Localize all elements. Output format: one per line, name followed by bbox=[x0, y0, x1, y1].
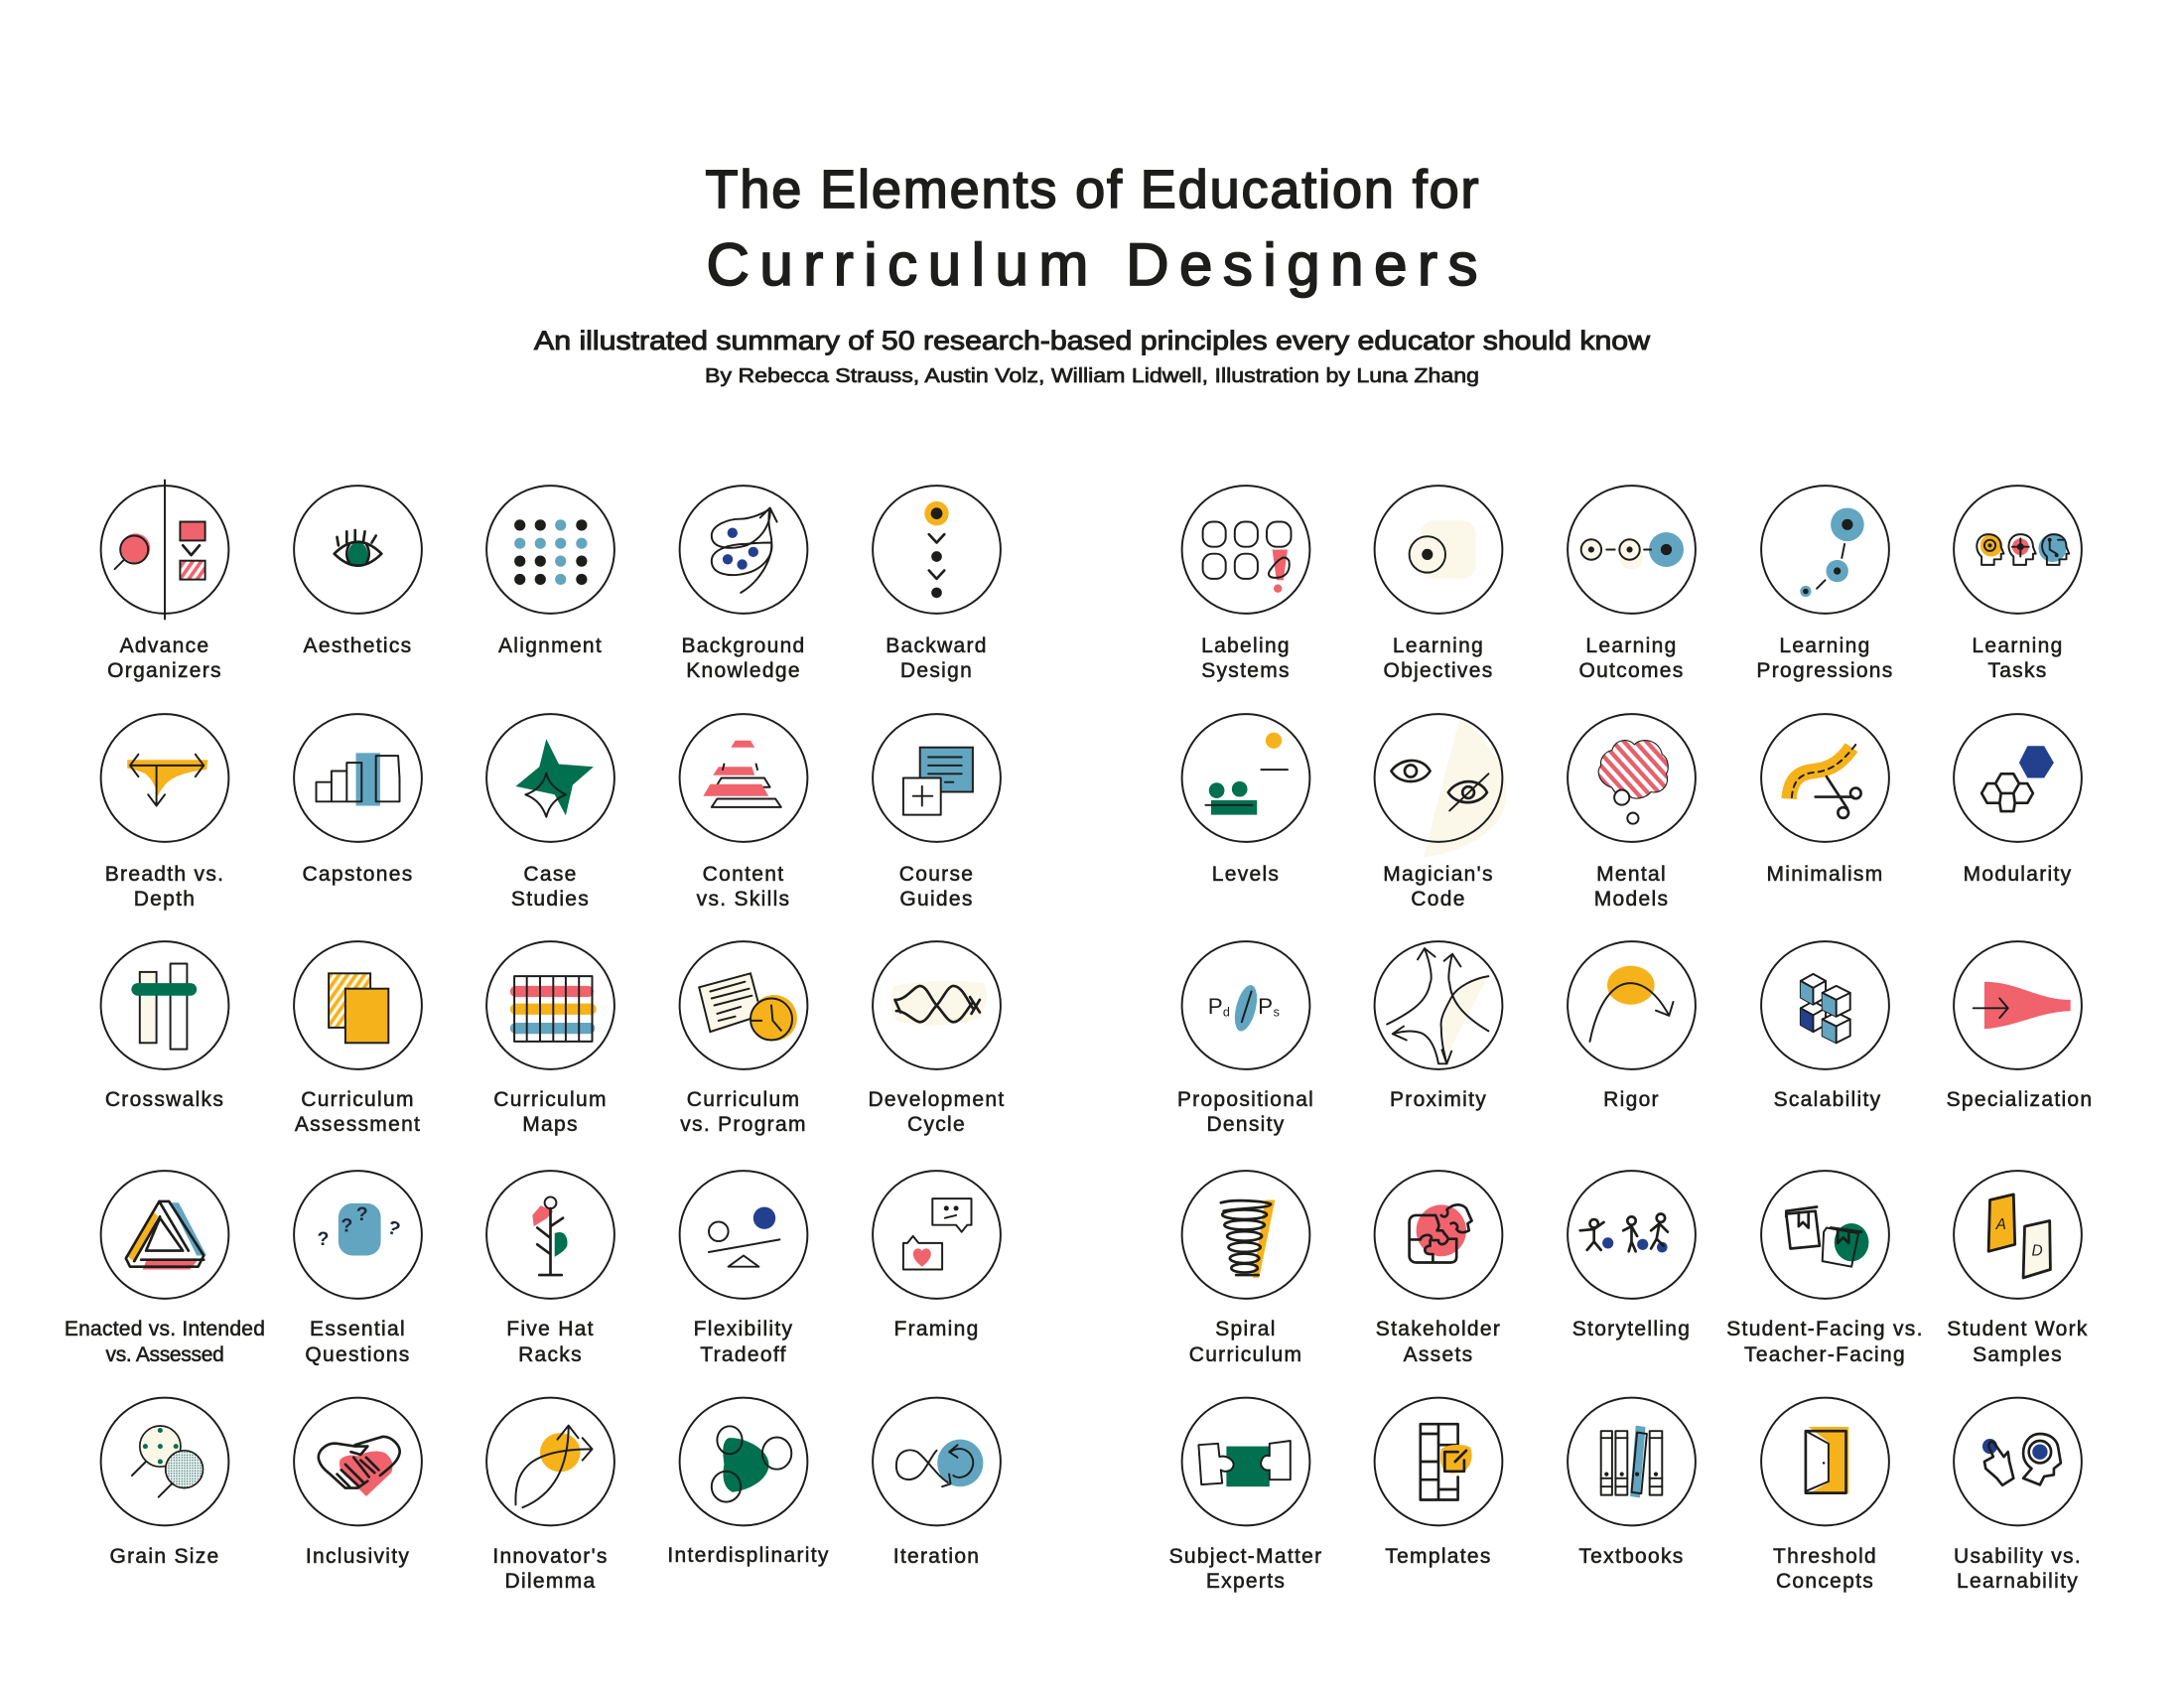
label: Backward bbox=[886, 634, 988, 657]
label: Specialization bbox=[1947, 1088, 2093, 1111]
icon: three heads bbox=[1954, 486, 2082, 614]
label: Learning bbox=[1779, 634, 1871, 657]
element: Levels bbox=[1182, 714, 1309, 886]
label: Learning bbox=[1972, 634, 2064, 657]
element: Interdisplinarity bbox=[667, 1398, 830, 1567]
element: Flexibility Tradeoff bbox=[680, 1171, 807, 1366]
label: Guides bbox=[899, 888, 974, 911]
element: Curriculum Assessment bbox=[294, 941, 422, 1136]
icon: question marks: ? bbox=[384, 1216, 403, 1241]
element: Scalability bbox=[1761, 941, 1889, 1111]
icon: speech boxes bbox=[873, 1171, 1001, 1299]
title bbox=[705, 160, 1479, 298]
icon: diverging arrows bbox=[486, 1398, 614, 1525]
element: Case Studies bbox=[486, 714, 614, 911]
label: Inclusivity bbox=[306, 1545, 410, 1568]
element: Propositional Density bbox=[1177, 941, 1314, 1136]
label: Design bbox=[900, 659, 973, 682]
icon: hand and head bbox=[1954, 1398, 2082, 1525]
label: vs. Assessed bbox=[106, 1343, 223, 1366]
label: Curriculum bbox=[1189, 1343, 1302, 1366]
label: Cycle bbox=[907, 1113, 966, 1136]
element: Inclusivity bbox=[294, 1398, 422, 1568]
label: Experts bbox=[1206, 1570, 1286, 1593]
label: Teacher-Facing bbox=[1744, 1343, 1906, 1366]
label: Knowledge bbox=[686, 659, 801, 682]
element: Student-Facing vs. Teacher-Facing bbox=[1726, 1171, 1924, 1366]
icon: three figures bbox=[1568, 1171, 1696, 1299]
label: Threshold bbox=[1773, 1545, 1877, 1568]
element: Advance Organizers bbox=[101, 481, 228, 682]
element: Labeling Systems bbox=[1182, 486, 1309, 682]
icon: branching arrows bbox=[1375, 941, 1502, 1069]
element: Course Guides bbox=[873, 714, 1001, 911]
label: Flexibility bbox=[694, 1318, 793, 1340]
label: Case bbox=[523, 863, 578, 886]
label: Magician's bbox=[1383, 863, 1494, 886]
label: Racks bbox=[518, 1343, 583, 1366]
icon: paper and clock bbox=[680, 941, 807, 1069]
icon: narrowing funnel bbox=[1954, 941, 2082, 1069]
element: Framing bbox=[873, 1171, 1001, 1340]
icon: Pd over Ps: s bbox=[1274, 1006, 1280, 1020]
label: Learnability bbox=[1957, 1570, 2079, 1593]
element: Modularity bbox=[1954, 714, 2082, 886]
icon: rising bars bbox=[294, 714, 422, 842]
label: Tradeoff bbox=[700, 1343, 787, 1366]
label: Storytelling bbox=[1572, 1318, 1691, 1340]
label: Advance bbox=[120, 634, 209, 657]
icon: book row bbox=[1568, 1398, 1696, 1525]
label: Innovator's bbox=[492, 1545, 609, 1568]
label: Learning bbox=[1393, 634, 1484, 657]
icon: rounded tiles with exclamation bbox=[1182, 486, 1309, 614]
icon: arc over sun bbox=[1568, 941, 1696, 1069]
label: Enacted vs. Intended bbox=[65, 1318, 265, 1340]
label: Objectives bbox=[1383, 659, 1494, 682]
label: Depth bbox=[134, 888, 196, 911]
element: Backward Design bbox=[873, 486, 1001, 682]
icon: question marks: ? bbox=[356, 1203, 368, 1225]
label: Labeling bbox=[1201, 634, 1291, 657]
icon: puzzle bbox=[1375, 1171, 1502, 1299]
label: Questions bbox=[305, 1343, 411, 1366]
label: Usability vs. bbox=[1954, 1545, 2082, 1568]
icon: stars bbox=[486, 714, 614, 842]
label: Modularity bbox=[1964, 863, 2072, 886]
icon: grid with bands bbox=[486, 941, 614, 1069]
element: Minimalism bbox=[1761, 714, 1889, 886]
icon: open door bbox=[1761, 1398, 1889, 1525]
element: Learning Objectives bbox=[1375, 486, 1502, 682]
icon: growing dots bbox=[1761, 486, 1889, 614]
label: Course bbox=[899, 863, 974, 886]
icon: scissors and path bbox=[1761, 714, 1889, 842]
label: Code bbox=[1411, 888, 1466, 911]
element: Curriculum Maps bbox=[486, 941, 614, 1136]
element: Grain Size bbox=[101, 1398, 228, 1568]
icon: overlapping sheets bbox=[294, 941, 422, 1069]
label: Outcomes bbox=[1578, 659, 1685, 682]
icon: intertwined waves bbox=[873, 941, 1001, 1069]
icon: dot grid bbox=[486, 486, 614, 614]
element: Five Hat Racks bbox=[486, 1171, 614, 1366]
label: Development bbox=[868, 1088, 1006, 1111]
icon: pyramid layers bbox=[680, 714, 807, 842]
icon: hands and heart bbox=[294, 1398, 422, 1525]
element: Student Work Samples bbox=[1947, 1171, 2089, 1366]
icon: eye bbox=[294, 486, 422, 614]
label: Minimalism bbox=[1767, 863, 1884, 886]
label: Spiral bbox=[1215, 1318, 1277, 1340]
icon: chain from goal bbox=[873, 486, 1001, 614]
icon: seen and hidden eyes bbox=[1375, 714, 1506, 857]
icon: graded cards: A bbox=[1995, 1216, 2006, 1233]
element: Learning Tasks bbox=[1954, 486, 2082, 682]
label: Proximity bbox=[1390, 1088, 1487, 1111]
icon: two magnifiers bbox=[101, 1398, 228, 1525]
label: Subject-Matter bbox=[1169, 1545, 1322, 1568]
label: Breadth vs. bbox=[105, 863, 224, 886]
label: Density bbox=[1206, 1113, 1286, 1136]
element: Essential Questions bbox=[294, 1171, 422, 1366]
label: Student Work bbox=[1947, 1318, 2089, 1340]
element: Magician's Code bbox=[1375, 714, 1506, 911]
icon: question marks bbox=[294, 1171, 422, 1299]
element: Crosswalks bbox=[101, 941, 228, 1111]
element: Learning Outcomes bbox=[1568, 486, 1696, 682]
label: Content bbox=[703, 863, 784, 886]
label: Progressions bbox=[1756, 659, 1894, 682]
icon: petals and arrow bbox=[680, 486, 807, 614]
element: Usability vs. Learnability bbox=[1954, 1398, 2082, 1593]
label: Samples bbox=[1973, 1343, 2063, 1366]
icon: hexagons bbox=[1954, 714, 2082, 842]
label: Iteration bbox=[893, 1545, 980, 1568]
label: Studies bbox=[511, 888, 590, 911]
icon: graded cards bbox=[1954, 1171, 2082, 1299]
label: Grain Size bbox=[109, 1545, 220, 1568]
element: Specialization bbox=[1947, 941, 2093, 1111]
label: Stakeholder bbox=[1376, 1318, 1501, 1340]
element: Development Cycle bbox=[868, 941, 1006, 1136]
label: Student-Facing vs. bbox=[1726, 1318, 1924, 1340]
label: Mental bbox=[1596, 863, 1667, 886]
label: Textbooks bbox=[1578, 1545, 1685, 1568]
title: The Elements of Education for bbox=[705, 160, 1479, 219]
label: vs. Program bbox=[680, 1113, 807, 1136]
element: Aesthetics bbox=[294, 486, 422, 657]
element: Curriculum vs. Program bbox=[680, 941, 807, 1136]
element: Templates bbox=[1375, 1398, 1502, 1568]
label: Rigor bbox=[1603, 1088, 1660, 1111]
icon: question marks: ? bbox=[318, 1228, 329, 1250]
label: Aesthetics bbox=[304, 634, 412, 657]
label: Tasks bbox=[1987, 659, 2048, 682]
label: Propositional bbox=[1177, 1088, 1314, 1111]
icon: coat rack bbox=[486, 1171, 614, 1299]
icon: Pd over Ps: d bbox=[1223, 1006, 1230, 1020]
label: Curriculum bbox=[493, 1088, 608, 1111]
title: Curriculum Designers bbox=[707, 231, 1477, 298]
icon: level steps bbox=[1182, 714, 1309, 842]
icon: graded cards: D bbox=[2032, 1243, 2043, 1260]
element: Learning Progressions bbox=[1756, 486, 1894, 682]
label: Levels bbox=[1212, 863, 1280, 886]
icon: stacked cubes bbox=[1761, 941, 1889, 1069]
icon: Pd over Ps: P bbox=[1258, 994, 1273, 1019]
element: Stakeholder Assets bbox=[1375, 1171, 1502, 1366]
label: Crosswalks bbox=[105, 1088, 224, 1111]
label: Alignment bbox=[498, 634, 603, 657]
label: Curriculum bbox=[301, 1088, 415, 1111]
label: vs. Skills bbox=[697, 888, 790, 911]
label: Concepts bbox=[1776, 1570, 1874, 1593]
element: Content vs. Skills bbox=[680, 714, 807, 911]
icon: Pd over Ps: P bbox=[1208, 994, 1223, 1019]
icon: overlapping blobs bbox=[680, 1398, 807, 1525]
label: Scalability bbox=[1774, 1088, 1881, 1111]
element: Mental Models bbox=[1568, 714, 1696, 911]
label: Framing bbox=[893, 1318, 980, 1340]
element: Enacted vs. Intended vs. Assessed bbox=[65, 1171, 265, 1366]
icon: infinity loop bbox=[873, 1398, 1001, 1525]
byline: By Rebecca Strauss, Austin Volz, William Lidwell, Illustration by Luna Zhang bbox=[705, 365, 1479, 387]
element: Capstones bbox=[294, 714, 422, 886]
icon: balance bbox=[680, 1171, 807, 1299]
element: Threshold Concepts bbox=[1761, 1398, 1889, 1593]
label: Systems bbox=[1201, 659, 1291, 682]
icon: target bbox=[1375, 486, 1502, 614]
label: Learning bbox=[1585, 634, 1678, 657]
label: Five Hat bbox=[506, 1318, 595, 1340]
element: Subject-Matter Experts bbox=[1169, 1398, 1322, 1593]
icon: thought cloud bbox=[1568, 714, 1696, 842]
icon: two books bbox=[1761, 1171, 1889, 1299]
icon: breadth and depth arrows bbox=[101, 714, 228, 842]
label: Background bbox=[681, 634, 806, 657]
label: Models bbox=[1594, 888, 1669, 911]
label: Organizers bbox=[107, 659, 222, 682]
element: Innovator's Dilemma bbox=[486, 1398, 614, 1593]
element: Textbooks bbox=[1568, 1398, 1696, 1568]
label: Assets bbox=[1404, 1343, 1473, 1366]
element: Spiral Curriculum bbox=[1182, 1171, 1309, 1366]
element: Iteration bbox=[873, 1398, 1001, 1568]
label: Maps bbox=[522, 1113, 579, 1136]
icon: Pd over Ps bbox=[1182, 941, 1309, 1069]
label: Dilemma bbox=[505, 1570, 596, 1593]
element: Proximity bbox=[1375, 941, 1502, 1111]
element: Alignment bbox=[486, 486, 614, 657]
icon: connected goals bbox=[1568, 486, 1696, 614]
icon: grid and pencil bbox=[1375, 1398, 1502, 1525]
icon: spiral bbox=[1182, 1171, 1309, 1299]
label: Curriculum bbox=[687, 1088, 800, 1111]
element: Rigor bbox=[1568, 941, 1696, 1111]
element: Breadth vs. Depth bbox=[101, 714, 228, 911]
label: Interdisplinarity bbox=[667, 1544, 830, 1567]
element: Storytelling bbox=[1568, 1171, 1696, 1340]
icon: magnifier and checklist bbox=[101, 481, 228, 620]
label: Capstones bbox=[302, 863, 414, 886]
label: Templates bbox=[1385, 1545, 1492, 1568]
icon: crossed bars bbox=[101, 941, 228, 1069]
subtitle: An illustrated summary of 50 research-based principles every educator should know bbox=[534, 326, 1651, 355]
icon: question marks: ? bbox=[341, 1215, 352, 1237]
label: Assessment bbox=[295, 1113, 421, 1136]
icon: documents bbox=[873, 714, 1001, 842]
label: Essential bbox=[310, 1318, 406, 1340]
icon: impossible triangle bbox=[101, 1171, 228, 1299]
icon: puzzle connector bbox=[1182, 1398, 1309, 1525]
element: Background Knowledge bbox=[680, 486, 807, 682]
